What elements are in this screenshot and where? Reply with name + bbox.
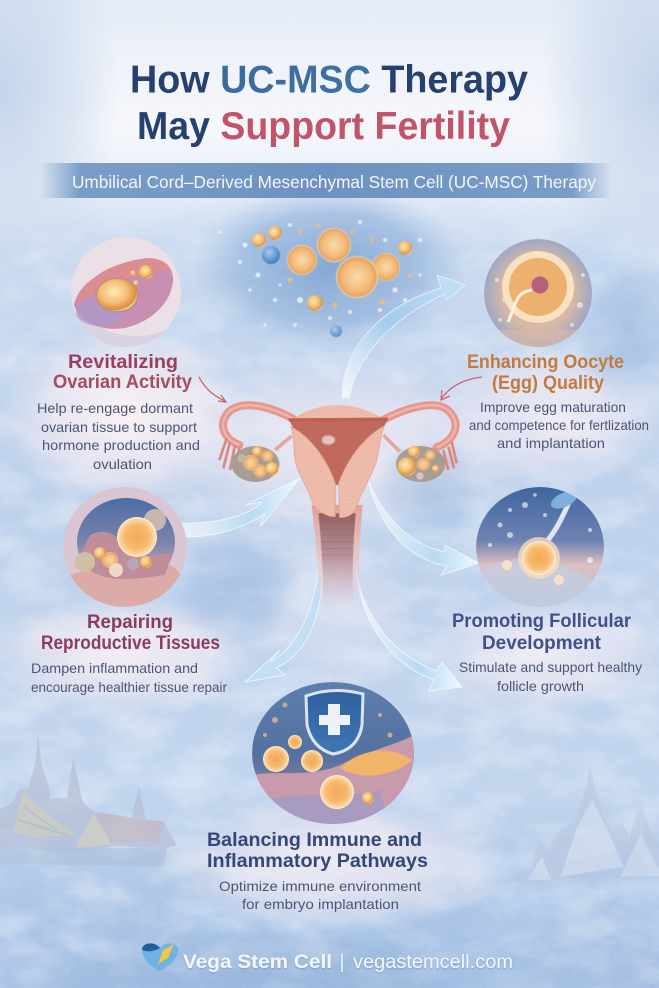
description: and competence for fertlization xyxy=(469,417,649,433)
arrow: small red to right ovary xyxy=(441,377,482,400)
heading: Development xyxy=(482,633,602,654)
description: and implantation xyxy=(497,435,605,451)
heading: Inflammatory Pathways xyxy=(207,851,428,872)
heading: Balancing Immune and xyxy=(207,830,422,851)
title line 1: How UC-MSC Therapy xyxy=(130,58,528,102)
heading xyxy=(41,612,220,654)
website: vegastemcell.com xyxy=(353,952,513,973)
description: ovulation xyxy=(93,456,152,472)
description xyxy=(459,659,642,694)
fallopian tube left xyxy=(223,405,295,445)
icon: ovary tissue xyxy=(71,237,182,347)
temple left xyxy=(0,733,177,867)
uterus illustration xyxy=(219,405,457,610)
description xyxy=(469,399,649,451)
separator: | xyxy=(340,952,344,973)
description: Improve egg maturation xyxy=(480,399,626,415)
brand name: Vega Stem Cell xyxy=(183,951,332,973)
arrow: small red to left ovary xyxy=(199,377,226,402)
shield xyxy=(306,690,363,754)
description: for embryo implantation xyxy=(242,896,399,912)
panel: promoting follicular development xyxy=(452,487,642,694)
panel: enhancing oocyte quality xyxy=(467,239,649,451)
subtitle banner xyxy=(40,163,612,198)
arrow: lower right xyxy=(356,572,462,691)
ligaments xyxy=(275,435,400,452)
uterine wall right xyxy=(339,426,384,518)
arrow: to follicular development xyxy=(368,480,479,575)
fallopian tube right xyxy=(383,405,456,447)
fimbriae xyxy=(219,438,457,470)
description: ovarian tissue to support xyxy=(41,419,197,435)
description: hormone production and xyxy=(42,437,200,453)
icon: follicle xyxy=(476,487,604,610)
heading: Reproductive Tissues xyxy=(41,633,220,654)
panel: revitalizing ovarian activity xyxy=(37,237,200,472)
description: Dampen inflammation and xyxy=(31,660,198,676)
description: encourage healthier tissue repair xyxy=(31,679,227,695)
arrow: up to oocyte xyxy=(342,275,465,398)
medical cross xyxy=(319,704,350,735)
panel: repairing reproductive tissues xyxy=(31,487,227,695)
heading xyxy=(207,830,428,872)
uterine wall left xyxy=(291,427,335,517)
vaginal canal xyxy=(312,505,363,610)
temple right xyxy=(527,765,659,880)
sparkle xyxy=(322,435,335,445)
subtitle text: Umbilical Cord–Derived Mesenchymal Stem Cell (UC-MSC) Therapy xyxy=(72,172,596,192)
heading xyxy=(53,352,192,393)
heading: Revitalizing xyxy=(68,352,178,373)
icon: tissue repair xyxy=(63,487,187,607)
arrow: to repair tissues, left-middle xyxy=(180,478,300,537)
description xyxy=(219,878,421,912)
uterus fundus xyxy=(293,405,383,418)
ovary left xyxy=(231,446,279,482)
title line 2: May Support Fertility xyxy=(137,105,510,148)
heading: Repairing xyxy=(87,612,173,633)
description xyxy=(37,400,200,472)
ovary right xyxy=(396,446,445,482)
stem cell cluster xyxy=(218,220,422,337)
title xyxy=(130,58,528,148)
icon: shield with tissue xyxy=(252,682,414,830)
heading: (Egg) Quality xyxy=(492,373,604,394)
description xyxy=(31,660,227,695)
heading: Promoting Follicular xyxy=(452,611,632,632)
heading xyxy=(452,611,632,654)
description: Stimulate and support healthy xyxy=(459,659,642,675)
heading: Ovarian Activity xyxy=(53,372,192,393)
icon: heart logo xyxy=(142,943,178,971)
heading: Enhancing Oocyte xyxy=(467,352,624,373)
description: Optimize immune environment xyxy=(219,878,421,894)
footer xyxy=(142,943,513,973)
icon: oocyte xyxy=(484,239,592,350)
description: Help re-engage dormant xyxy=(37,400,193,416)
uterine cavity xyxy=(288,418,388,485)
panel: balancing immune and inflammatory pathways xyxy=(207,682,428,912)
description: follicle growth xyxy=(497,678,584,694)
heading xyxy=(467,352,624,394)
arrow: lower left xyxy=(245,572,322,682)
